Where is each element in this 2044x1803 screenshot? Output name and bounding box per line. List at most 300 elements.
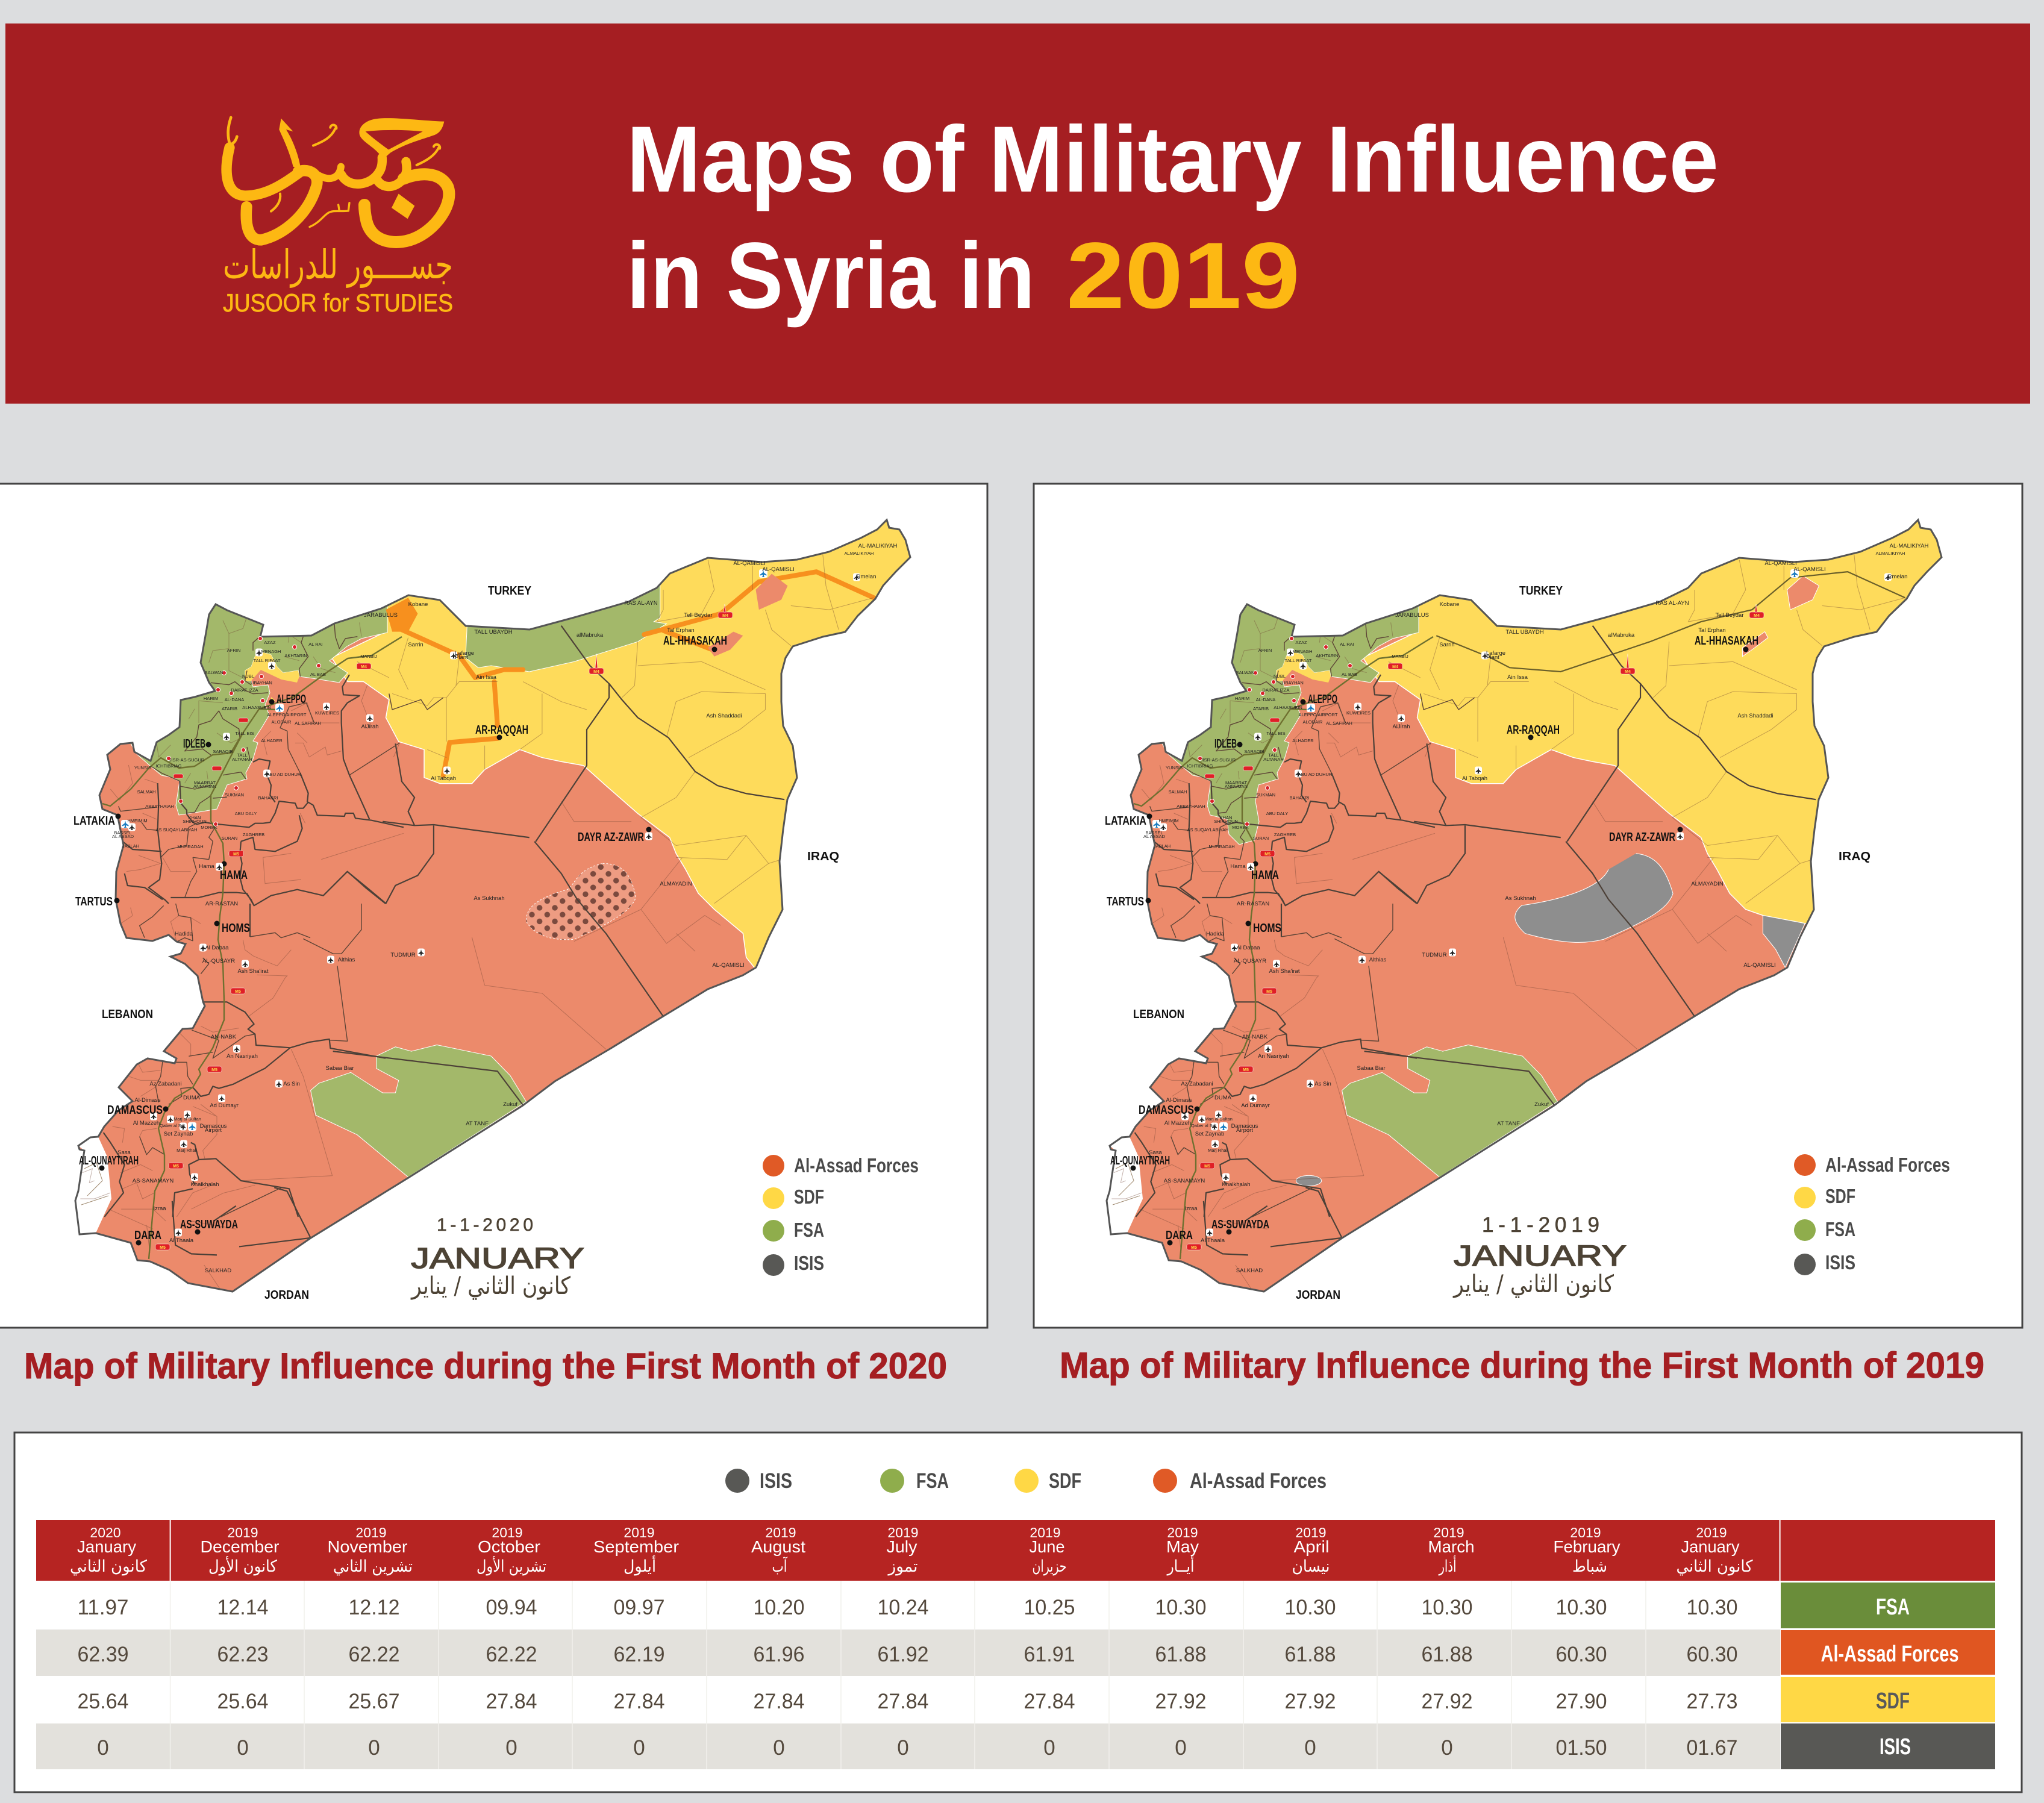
tiny place names north-west: ALMALIKIYAH [1876,551,1905,556]
row: SDF: 27.73 [1687,1690,1737,1713]
map labels 2019: AL-HHASAKAH [1695,634,1758,648]
panel: map January 2020 [0,470,987,1328]
legend [1794,1154,1950,1275]
row: SDF: 25.67 [348,1690,400,1713]
map labels 2019 [1105,543,1929,1302]
territory: FSA north and Idlib [1152,542,1419,845]
tiny place names north-west: AS SUQAYLABIYAH [156,827,197,833]
highway badge labels [160,614,728,1250]
tiny place names north-west: SURAN [1253,836,1269,841]
tiny place names north-west: MENAGH [1293,649,1312,654]
legend: ISIS [1825,1251,1855,1273]
small place names: Tal Erphan [667,627,695,634]
tiny place names north-west: YUNSIS [134,765,151,770]
tiny place names north-west: ALHAASUBIN [1274,705,1302,710]
turkish posts [166,636,320,827]
front lines orange [386,598,417,632]
table header: August [751,1537,805,1556]
tiny place names north-west: ALEPPO AIRPORT [267,712,307,717]
highway badge labels: M4 [593,670,599,674]
row: FSA: 09.97 [613,1596,665,1619]
tiny place names north-west: ALODAIR [1303,719,1323,725]
small place names: TALL UBAYDH [474,629,513,636]
map labels 2020: HOMS [222,922,250,935]
tiny place names north-west: HARIM [204,696,218,701]
highway badges [155,604,733,1250]
map labels 2020: LATAKIA [73,814,115,828]
row: SDF: 27.92 [1155,1690,1206,1713]
map labels 2020: LEBANON [102,1008,153,1021]
tiny place names north-west: Marj al Sultan [173,1116,201,1122]
row: FSA: 10.24 [877,1596,929,1619]
row: ISIS: 0 [97,1736,109,1760]
small place names: AL-QAMISLI [762,566,795,573]
tiny place names north-west: AZAZ [264,640,276,645]
highway badge labels [1191,614,1760,1250]
map labels 2020: AL-HHASAKAH [663,634,727,648]
small place names: Tell Beydar [1716,612,1743,619]
logo: Jusoor for Studies [223,117,453,317]
small place names: RAS AL-AYN [624,600,658,607]
tiny place names north-west: JISR-AS-SUGUR [169,757,205,763]
row: FSA [77,1583,1995,1628]
small place names: Tell Beydar [684,612,712,619]
small place names: Al Tabqah [1462,775,1487,782]
row: Al-Assad Forces [77,1630,1995,1675]
highway badge labels: M5 [1243,1068,1249,1072]
tiny place names north-west: HARIM [1235,696,1249,701]
small place names: Sasa [117,1149,131,1156]
borders and roads [80,554,874,1289]
table header: 2019 [1433,1525,1464,1540]
tiny place names north-west: UBAYHAN [1282,680,1304,686]
small place names: Al-Dimass [134,1097,161,1104]
territory: SDF [1363,470,1988,923]
tiny place names north-west: ZAGHREB [1274,832,1296,837]
small place names: Set Zaynab [164,1131,193,1137]
tiny place names north-west: ALHADER [261,738,283,743]
legend: Al-Assad Forces [794,1154,919,1176]
tiny place names north-west [1143,551,1905,1153]
map labels 2019: DAMASCUS [1139,1104,1194,1117]
highway badges [1187,604,1764,1250]
small place names: TALL UBAYDH [1505,629,1544,636]
tiny place names north-west: HMEIMIM [127,818,148,823]
table header: أيلول [624,1555,656,1576]
table header: September [593,1537,679,1556]
airbase markers [121,569,860,1236]
tiny place names north-west: Marj Rhail [177,1148,197,1153]
map labels 2020: IRAQ [807,850,839,863]
small place names: alMabruka [1608,632,1635,639]
row: Al-Assad Forces: 61.88 [1422,1643,1472,1666]
small place names: DUMA [183,1095,201,1101]
map labels 2020: HAMA [220,869,248,882]
small place names: Al Mazzeh [1164,1120,1191,1126]
tiny place names north-west: AS SUQAYLABIYAH [1187,827,1228,833]
small place names [1149,543,1929,1274]
map labels 2019: JORDAN [1296,1289,1340,1302]
tiny place names north-west: AL BAB [1342,672,1357,677]
row: ISIS: 0 [633,1736,645,1760]
small place names: As Sin [1314,1081,1331,1087]
table legend: ISIS [760,1469,792,1493]
small place names: DUMA [1214,1095,1232,1101]
row: Al-Assad Forces: 62.23 [217,1643,269,1666]
small place names: Izraa [1184,1205,1198,1212]
small place names: ALMAYADIN [1691,881,1724,887]
tiny place names north-west: KHAN [189,815,201,820]
map labels 2020: AR-RAQQAH [475,723,528,737]
title [627,107,1719,328]
tiny place names north-west: ANNUMAN [1225,784,1248,789]
highway badge labels: M5 [1191,1246,1197,1250]
territories in stretched coordinates [311,550,874,1177]
small place names: ALMAYADIN [660,881,692,887]
row: Al-Assad Forces: 62.19 [613,1643,665,1666]
tiny place names north-west: AL BAB [310,672,326,677]
small place names: Ash Shaddadi [1737,713,1774,719]
map of Syria 2019 [1107,470,1988,1292]
country outline [1107,520,1942,1292]
table header: 2019 [887,1525,919,1540]
date block: JANUARY [1454,1240,1627,1272]
highway badge labels: M5 [235,990,241,994]
small place names: Kobane [408,601,428,608]
table header [36,1520,1995,1581]
row: ISIS: 01.50 [1555,1736,1607,1760]
table header: January [77,1537,136,1556]
map labels 2019: ALEPPO [1308,693,1337,706]
M4 highway [1436,572,1905,672]
small place names: Ash Sha'irat [238,968,269,975]
row: FSA: FSA [1876,1595,1910,1620]
row: ISIS: 0 [1304,1736,1316,1760]
tiny place names north-west: ALHADER [1292,738,1314,743]
small place names: Khalkhalah [1222,1181,1251,1188]
small place names: AL-MALIKIYAH [1890,543,1929,549]
small place names: AL-QUSAYR [202,958,235,964]
row: Al-Assad Forces: 61.88 [1284,1643,1336,1666]
row: FSA: 10.25 [1024,1596,1075,1619]
map labels 2020: ALEPPO [277,693,306,706]
table header: November [328,1537,407,1556]
tiny place names north-west: MAARRAT [1225,780,1247,786]
small place names [117,543,898,1274]
tiny place names north-west: ANNUMAN [193,784,216,789]
small place names: As Sukhnah [473,895,505,902]
map labels 2019: LATAKIA [1105,814,1146,828]
small place names: AL-QAMISLI [733,560,766,567]
small place names: Damascus [1231,1123,1258,1130]
tiny place names north-west: AKHTARIN [1316,653,1339,658]
header banner [5,23,2030,404]
city dots [99,647,717,1246]
row: SDF: 27.84 [486,1690,537,1713]
tiny place names north-west: KHAN [1220,815,1232,820]
tiny place names north-west: AFRIN [227,648,240,653]
small place names: AS-SANAMAYN [1164,1178,1205,1184]
tiny place names north-west: AFRIN [1258,648,1272,653]
small place names: RAS AL-AYN [1655,600,1689,607]
row: Al-Assad Forces: 62.22 [486,1643,537,1666]
tiny place names north-west [112,551,874,1153]
tiny place names north-west: AL ASSAD [112,834,134,839]
table legend: SDF [1049,1469,1081,1493]
caption 2019: Map of Military Influence during the First Month of 2019 [1060,1345,1984,1386]
highway badge labels: M5 [1266,990,1272,994]
table header: April [1294,1537,1329,1556]
small place names: Zukuf [1534,1101,1549,1108]
small place names: Set Zaynab [1195,1131,1224,1137]
small place names: AL-MALIKIYAH [858,543,898,549]
table header: تشرين الأول [477,1555,546,1576]
table legend [725,1469,1327,1493]
territory: SDF [332,522,910,967]
row: Al-Assad Forces: 62.39 [77,1643,129,1666]
map labels 2019: IDLEB [1214,737,1237,751]
small place names: AL-QAMISLI [1764,560,1797,567]
table header: December [200,1537,280,1556]
small place names: Ash Sha'irat [1269,968,1300,975]
row: FSA: 10.20 [753,1596,805,1619]
territory: FSA north and Idlib [130,605,388,816]
row: Al-Assad Forces: 62.22 [348,1643,400,1666]
tiny place names north-west: UBAYHAN [251,680,272,686]
map labels 2019: IRAQ [1839,850,1871,863]
tiny place names north-west: TALL [1268,752,1279,758]
small place names: AR-RASTAN [205,901,238,907]
table legend: Al-Assad Forces [1190,1469,1327,1493]
small place names: Zukuf [503,1101,517,1108]
small place names: Al Thaala [1201,1237,1225,1244]
small place names: JARABULUS [1395,612,1429,619]
row: FSA: 10.30 [1422,1596,1472,1619]
small place names: Sabaa Biar [325,1065,354,1072]
tiny place names north-west: ABU DALY [235,811,257,816]
small place names: TUDMUR [1422,952,1447,958]
al-Tanf zone [311,1045,526,1177]
tiny place names north-west: SHIKHOUN [183,819,207,824]
small place names: Rmelan [1888,573,1907,580]
table header: 2020 [90,1525,121,1540]
row: ISIS: 0 [773,1736,785,1760]
row: SDF [77,1677,1995,1722]
small place names: As Sukhnah [1505,895,1536,902]
table header: January [1681,1537,1740,1556]
title: in Syria in [627,223,1035,328]
tiny place names north-west: JISR-AS-SUGUR [1201,757,1236,763]
map labels 2019: DARA [1166,1229,1193,1242]
al-Tanf zone [1342,1045,1557,1177]
table header: 2019 [1570,1525,1601,1540]
regime pockets [1742,576,1819,657]
tiny place names north-west: AL-DANA [225,697,244,702]
row: FSA: 10.30 [1555,1596,1607,1619]
row: SDF: 27.84 [1024,1690,1075,1713]
row: ISIS: 0 [897,1736,909,1760]
table header: 2019 [355,1525,387,1540]
tiny place names north-west: JABLAH [122,843,139,849]
map labels 2020 [73,543,898,1302]
turkish posts [1198,636,1352,827]
tiny place names north-west: SARAQIB [1244,749,1264,754]
row: Al-Assad Forces: 60.30 [1687,1643,1737,1666]
tiny place names north-west: SUKMAN [1256,792,1275,798]
row: ISIS: ISIS [1880,1734,1911,1760]
highway badge labels: M4 [1392,665,1398,669]
table header: كانون الأول [208,1555,277,1576]
tiny place names north-west: AL ASSAD [1143,834,1166,839]
tiny place names north-west: MANBIJ [360,654,377,659]
tiny place names north-west: MENAGH [261,649,281,654]
tiny place names north-west: BASSEL [114,830,132,836]
table header: 2019 [624,1525,655,1540]
row: SDF: 27.84 [877,1690,929,1713]
caption 2020: Map of Military Influence during the First Month of 2020 [24,1346,947,1386]
small place names: An Nasriyah [1258,1053,1289,1060]
tiny place names north-west: NUBL [1274,673,1286,679]
city dots [1130,647,1748,1246]
map labels 2020: DARA [134,1229,161,1242]
ISIS presence dotted [526,863,636,940]
small place names: Hama [1230,863,1246,870]
table header: كانون الثاني [70,1557,147,1576]
table header: شباط [1572,1557,1607,1576]
small place names: Al Dabaa [205,945,229,951]
legend: SDF [794,1186,824,1208]
row: Al-Assad Forces: 61.91 [1024,1643,1075,1666]
row: SDF: 27.92 [1284,1690,1336,1713]
map labels 2019: HAMA [1251,869,1279,882]
table header: آب [772,1557,788,1576]
table header: تشرين الثاني [333,1557,413,1576]
table header: July [887,1537,917,1556]
tiny place names north-west: ABBAYHAIAH [1177,804,1205,809]
legend: Al-Assad Forces [1825,1154,1950,1176]
tiny place names north-west: ALTANAH [1263,757,1284,762]
tiny place names north-west: ALODAIR [272,719,292,725]
small place names: Az Zabadani [149,1081,182,1087]
row: FSA: 11.97 [77,1596,129,1619]
small place names: Izraa [153,1205,166,1212]
row: ISIS: 0 [1175,1736,1187,1760]
table header: نيسان [1292,1557,1330,1576]
map labels 2020: AL-QUNAYTIRAH [79,1154,139,1167]
small place names: SALKHAD [1236,1267,1263,1274]
tiny place names north-west: Marj Rhail [1208,1148,1228,1153]
small place names: Sarrin [1439,642,1455,648]
small place names: Rmelan [857,573,876,580]
ISIS zones [1296,854,1805,1186]
row: SDF: 27.92 [1422,1690,1472,1713]
small place names: Hadida [175,931,193,937]
tiny place names north-west: ATARIB [1253,706,1269,711]
tiny place names north-west: Qaber al Set [160,1123,186,1128]
row: SDF: 27.84 [753,1690,805,1713]
tiny place names north-west: AL SAFIRAH [295,720,321,726]
tiny place names north-west: MOREK [1232,825,1249,830]
tiny place names north-west: TALL RIFAAT [254,658,281,663]
map labels 2020: TURKEY [488,584,532,598]
map labels 2019: AS-SUWAYDA [1211,1218,1269,1231]
tiny place names north-west: SHIKHOUN [1214,819,1238,824]
row: FSA: 12.14 [217,1596,269,1619]
small place names: Sarrin [408,642,423,648]
small place names: AlJirah [1392,723,1410,730]
tiny place names north-west: KUWEIRES [1346,710,1370,716]
tiny place names north-west: TALL RIFAAT [1285,658,1312,663]
small place names: Ash Shaddadi [706,713,742,719]
row: Al-Assad Forces: 61.96 [753,1643,805,1666]
small place names: JARABULUS [364,612,398,619]
highway badge labels: M5 [1204,1164,1210,1169]
tiny place names north-west: YUNSIS [1166,765,1183,770]
highway badge labels: M5 [173,1164,179,1169]
tiny place names north-west: DAIRAT IZZA [231,687,258,693]
panel: map January 2019 [1034,470,2022,1328]
tiny place names north-west: ABBAYHAIAH [145,804,174,809]
borders and roads [1111,554,1905,1289]
table header: March [1428,1537,1475,1556]
tiny place names north-west: NUBL [242,673,254,679]
tiny place names north-west: BAHAKRI [258,795,278,801]
tiny place names north-west: MAARRAT [194,780,216,786]
small place names: Damascus [200,1123,227,1130]
highway badge labels: M4 [361,665,367,669]
tiny place names north-west: SALMAH [137,789,155,795]
airbase markers [1152,569,1892,1236]
tiny place names north-west: AKHTARIN [284,653,307,658]
map labels 2020: TARTUS [75,895,113,908]
row: Al-Assad Forces: 61.88 [1155,1643,1206,1666]
map labels 2019: HOMS [1253,922,1281,935]
tiny place names north-west: SALMAH [1169,789,1187,795]
small place names: AN-NABK [1242,1034,1268,1040]
tiny place names north-west: ALMALIKIYAH [845,551,874,556]
row: SDF: 25.64 [217,1690,269,1713]
tiny place names north-west: MANBIJ [1392,654,1408,659]
map labels 2019: DAYR AZ-ZAWR [1609,831,1675,844]
small place names: Plant [455,654,468,661]
table header: May [1166,1537,1199,1556]
tiny place names north-west: ALEPPO AIRPORT [1299,712,1338,717]
date block [410,1215,584,1300]
table header: أذار [1438,1555,1457,1576]
row: SDF: 27.90 [1555,1690,1607,1713]
legend: ISIS [794,1252,824,1274]
row: SDF: 27.84 [613,1690,665,1713]
row: ISIS: 0 [1441,1736,1453,1760]
tiny place names north-west: TALL EIS [235,731,254,736]
small place names: Hadida [1206,931,1225,937]
tiny place names north-west: AL SAFIRAH [1326,720,1352,726]
legend [763,1154,919,1276]
table header: 2019 [227,1525,258,1540]
date block: JANUARY [411,1243,584,1275]
small place names: Airport [205,1127,222,1134]
tiny place names north-west: ICHTIBRIAG [1187,763,1213,769]
table header: 2019 [492,1525,523,1540]
tiny place names north-west: Marj al Sultan [1205,1116,1233,1122]
tiny place names north-west: ALTANAH [232,757,252,762]
table legend: FSA [916,1469,949,1493]
table row backgrounds [36,1581,1780,1769]
tiny place names north-west: KUWEIRES [315,710,339,716]
table header: 2019 [765,1525,796,1540]
Golan [75,1137,111,1234]
small place names: Airport [1236,1127,1253,1134]
